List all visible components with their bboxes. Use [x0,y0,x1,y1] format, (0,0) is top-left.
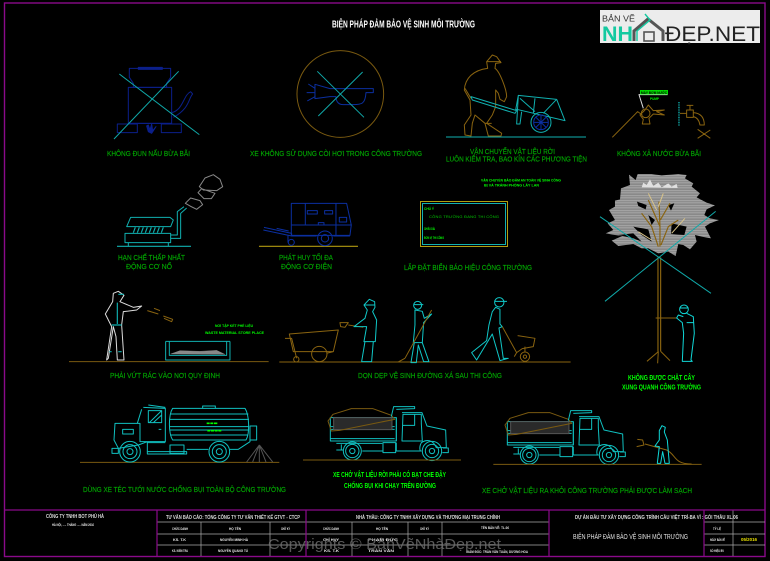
icon: water tanker truck [80,405,279,462]
label: waste place [205,323,264,335]
caption: transport materials: LUÔN KIỂM TRA, BAO KÍN CÁC PHƯƠNG TIỆN [446,154,587,164]
title block: CHỈ HUY [323,537,339,542]
label: pump note: MÁY BƠM NƯỚC [641,90,667,95]
title block: SỐ HIỆU BV [710,548,724,553]
caption: use electric engines: ĐỘNG CƠ ĐIỆN [281,262,332,271]
label: waste place: WASTE MATERIAL STORE PLACE [205,330,264,335]
title block: NGUYỄN QUANG TÚ [218,548,248,553]
icon: tree not to be cut with worker [600,174,719,363]
title block [5,510,765,556]
caption: do not cut trees: KHÔNG ĐƯỢC CHẶT CÂY [628,373,695,382]
site sign board: CHÚ Ý [424,206,434,211]
icon: dump truck being cleaned [493,411,702,465]
title block: CHỮ KÝ [281,526,290,531]
logo: Bản vẽ Nhà Đẹp: ĐẸP.NET [665,23,760,46]
watermark: Copyrights © BảnVẽNhàĐẹp.net [268,536,502,553]
caption: tanker sprays water: DÙNG XE TÉC TƯỚI NƯỚC CHỐNG BỤI TOÀN BỘ CÔNG TRƯỜNG [83,484,286,494]
caption: use electric engines: PHÁT HUY TỐI ĐA [279,252,333,262]
caption: use electric engines [279,252,333,271]
title block: HỌ TÊN [229,526,241,531]
label: pump note: PUMP [650,96,659,101]
title block: CHỨC DANH [323,526,339,531]
logo: Bản vẽ Nhà Đẹp: NH [602,23,633,46]
caption: no horn: XE KHÔNG SỬ DỤNG CÒI HƠI TRONG CÔNG TRƯỜNG [250,149,422,158]
note: sign text [481,178,561,188]
title block: PHẠM ĐỨC [368,537,398,542]
title block: GIÁM ĐỐC: TRẦN VĂN TUẤN, DƯƠNG HOA [466,549,528,554]
title: BIỆN PHÁP ĐẢM BẢO VỆ SINH MÔI TRƯỜNG [332,18,475,30]
caption: trucks must be covered: XE CHỞ VẬT LIỆU RỜI PHẢI CÓ BẠT CHE ĐẬY [333,470,446,479]
caption: limit combustion engines: ĐỘNG CƠ NỔ [126,262,172,271]
icon: covered dump truck [303,407,461,461]
caption: trucks must be clean leaving site: XE CHỞ VẬT LIỆU RA KHỎI CÔNG TRƯỜNG PHẢI ĐƯỢC LÀM SẠCH [482,486,692,495]
caption: no cooking: KHÔNG ĐUN NẤU BỪA BÃI [107,148,190,158]
icon: man throwing rubbish into pit [69,291,269,362]
icon: worker with wheelbarrow [446,55,586,137]
label: waste place: NƠI TẬP KẾT PHẾ LIỆU [215,323,253,328]
site sign board: CÔNG TRƯỜNG ĐANG THI CÔNG [429,214,499,219]
title block: CÔNG TY TNHH BOT PHÚ HÀ [46,512,104,520]
title block: BIỆN PHÁP ĐẢM BẢO VỆ SINH MÔI TRƯỜNG [573,532,688,541]
icon: electric generator [259,203,358,246]
title block: KS. KIỂM TRA [172,548,188,553]
title block: CHỨC DANH [172,526,188,531]
icon: cart and workers cleaning road [279,298,571,363]
title block: CHỮ KÝ [420,526,429,531]
site sign board: ĐƠN VỊ THI CÔNG [424,235,444,240]
icon: crossed-out horn [297,51,384,137]
title block: NGÀY BẢN VẼ [710,537,725,542]
icon: water pump and tap [612,95,710,138]
caption: limit combustion engines [118,252,185,271]
note: sign text: VẬN CHUYỂN BẢO ĐẢM AN TOÀN VỆ SINH CÔNG [481,178,561,182]
site sign board [420,202,508,246]
caption: trucks must be covered [333,470,446,490]
title block: 05/2016 [741,537,757,542]
caption: no water discharge: KHÔNG XẢ NƯỚC BỪA BÃI [617,149,701,158]
logo: Bản vẽ Nhà Đẹp [600,10,760,46]
caption: install site signs: LẮP ĐẶT BIỂN BÁO HIỆU CÔNG TRƯỜNG [404,263,532,272]
site sign board: CHIỀU DÀI [424,226,435,231]
title block: TRẦN VĂN [368,548,394,553]
title block: HÀ NỘI, ..... THÁNG ..... NĂM 2016 [52,522,95,527]
caption: limit combustion engines: HẠN CHẾ THẤP NHẤT [118,252,185,262]
caption: do not cut trees [622,373,701,392]
label: pump note [640,90,668,101]
note: sign text: BỊ VÀ TRÁNH PHÒNG LÂY LAN [484,182,539,188]
title block: DỰ ÁN ĐẦU TƯ XÂY DỰNG CÔNG TRÌNH CẦU VIỆT TRÌ-BA VÌ : GÓI THẦU XL.06 [575,513,738,521]
caption: clean road after construction: DỌN DẸP VỆ SINH ĐƯỜNG XÁ SAU THI CÔNG [358,371,502,380]
title block: TÊN BẢN VẼ: TL.06 [481,525,510,530]
caption: throw rubbish at set place: PHẢI VỨT RÁC VÀO NƠI QUY ĐỊNH [110,371,220,380]
icon: crossed-out stove [114,67,199,139]
logo: Bản vẽ Nhà Đẹp: BẢN VẼ [602,14,635,24]
title block: TƯ VẤN BÁO CÁO: TỔNG CÔNG TY TƯ VẤN THIẾT KẾ GTVT - CTCP [166,513,301,521]
caption: trucks must be covered: CHỐNG BỤI KHI CHẠY TRÊN ĐƯỜNG [344,480,436,490]
caption: transport materials [446,147,587,164]
title block: NGUYỄN MINH HÀ [220,537,248,542]
caption: transport materials: VẬN CHUYỂN VẬT LIỆU RỜI [470,147,555,156]
title block: KS. T.K [324,548,339,553]
title block: HỌ TÊN [376,526,388,531]
title block: KS. T.K [173,537,186,542]
title block: NHÀ THẦU: CÔNG TY TNHH XÂY DỰNG VÀ THƯƠNG MẠI TRUNG CHÍNH [356,513,500,521]
caption: do not cut trees: XUNG QUANH CÔNG TRƯỜNG [622,382,701,392]
title block: TỶ LỆ [713,526,721,531]
icon: combustion engine with smoke [117,175,223,246]
